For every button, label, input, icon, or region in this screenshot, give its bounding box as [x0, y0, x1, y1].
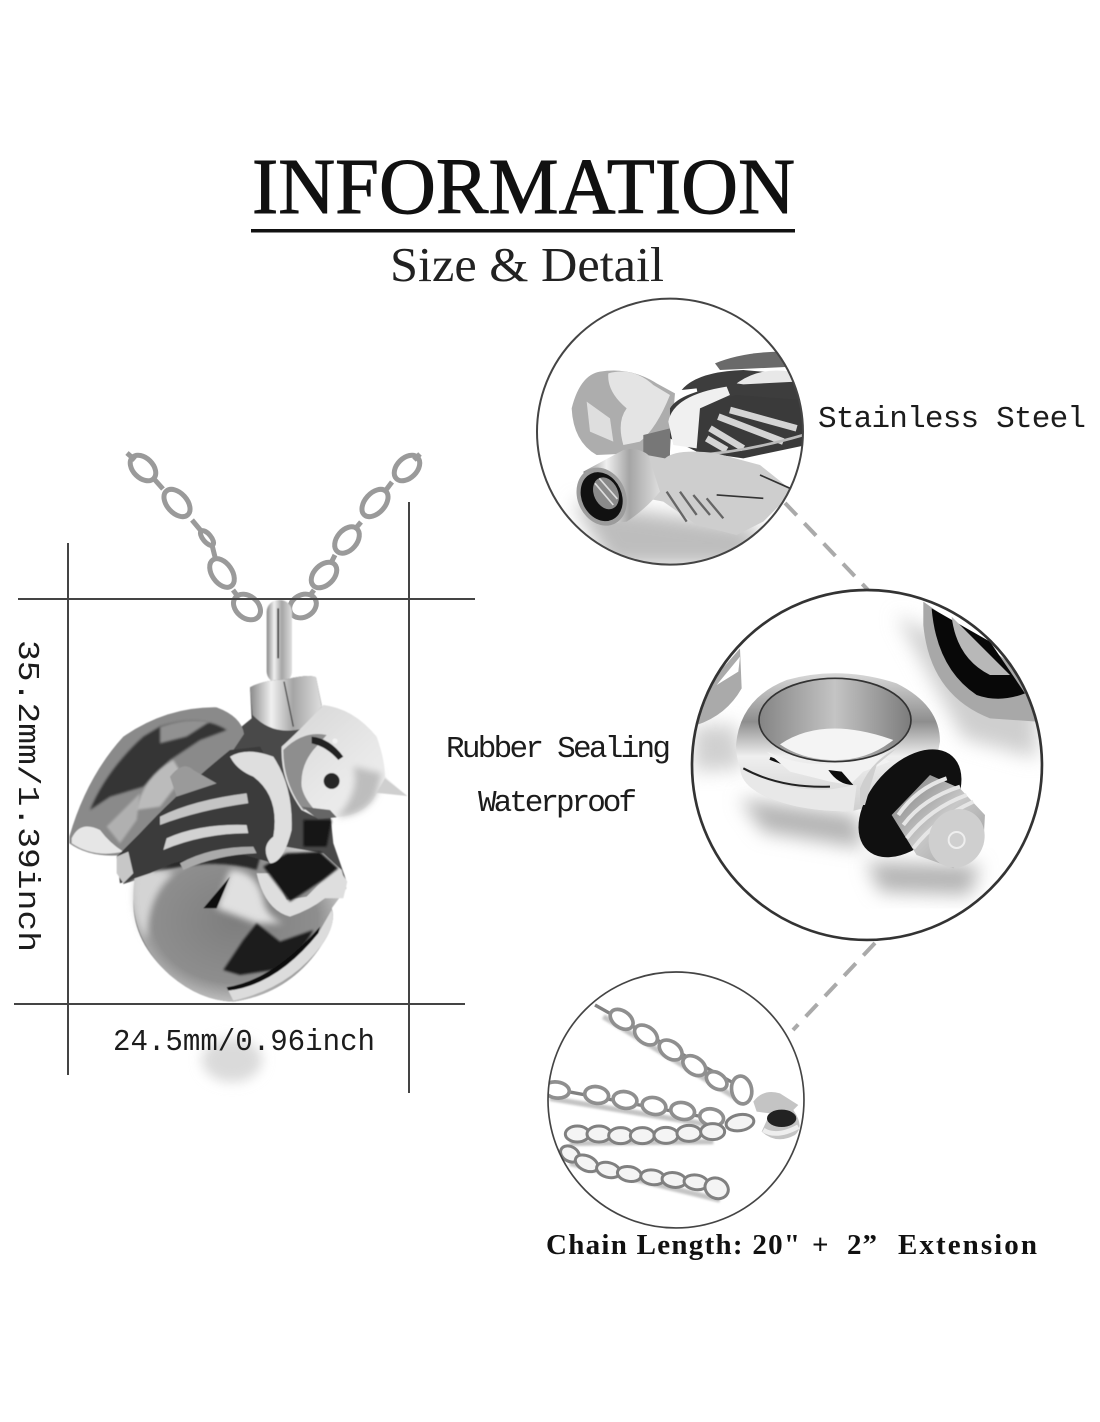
subtitle: Size & Detail	[390, 237, 664, 292]
wing feathers	[670, 392, 802, 458]
label: chain length: +	[812, 1229, 829, 1261]
silhouette base	[117, 676, 347, 1002]
floor shadow	[573, 502, 763, 565]
inner wing feathers	[117, 747, 292, 883]
label: chain length	[546, 1229, 1037, 1261]
lobster clasp	[753, 1092, 800, 1139]
pendant necklace chain	[125, 450, 425, 625]
circle detail: stainless steel	[536, 298, 804, 566]
circle detail: chain	[540, 970, 810, 1235]
threaded tube	[583, 449, 660, 525]
dimension lines	[14, 502, 475, 1093]
chain links	[543, 1005, 755, 1202]
label: chain length: Extension	[898, 1229, 1037, 1261]
pendant shadow	[202, 1038, 262, 1082]
outer wing	[69, 707, 244, 856]
soft shadows	[693, 725, 743, 772]
bird head from behind	[572, 371, 675, 455]
height label: 35.2mm/1.39inch	[9, 640, 44, 952]
bird head	[282, 705, 407, 847]
title underline	[251, 229, 795, 232]
width label: 24.5mm/0.96inch	[113, 1025, 375, 1060]
threaded plug	[892, 775, 985, 868]
lower feathers	[647, 452, 793, 535]
body highlights and dark folds	[133, 847, 347, 1001]
bail	[267, 600, 292, 683]
label: waterproof: Waterproof	[478, 786, 637, 821]
circle detail: rubber sealing	[690, 585, 1050, 945]
ring	[736, 673, 940, 812]
dashed connector bottom	[793, 943, 875, 1030]
label: chain length: 2”	[847, 1229, 877, 1261]
cap	[250, 676, 322, 731]
dashed connector top	[785, 503, 868, 590]
neighbouring parts	[693, 648, 742, 725]
chain shadow	[550, 1017, 737, 1200]
label: chain length: Chain Length: 20"	[546, 1229, 800, 1261]
label: stainless steel: Stainless Steel	[818, 402, 1086, 437]
pendant: bird on heart	[69, 600, 407, 1002]
label: rubber sealing: Rubber Sealing	[446, 732, 671, 767]
rubber o-ring	[858, 749, 962, 858]
title: INFORMATION	[252, 144, 795, 231]
heart body	[133, 840, 347, 1002]
